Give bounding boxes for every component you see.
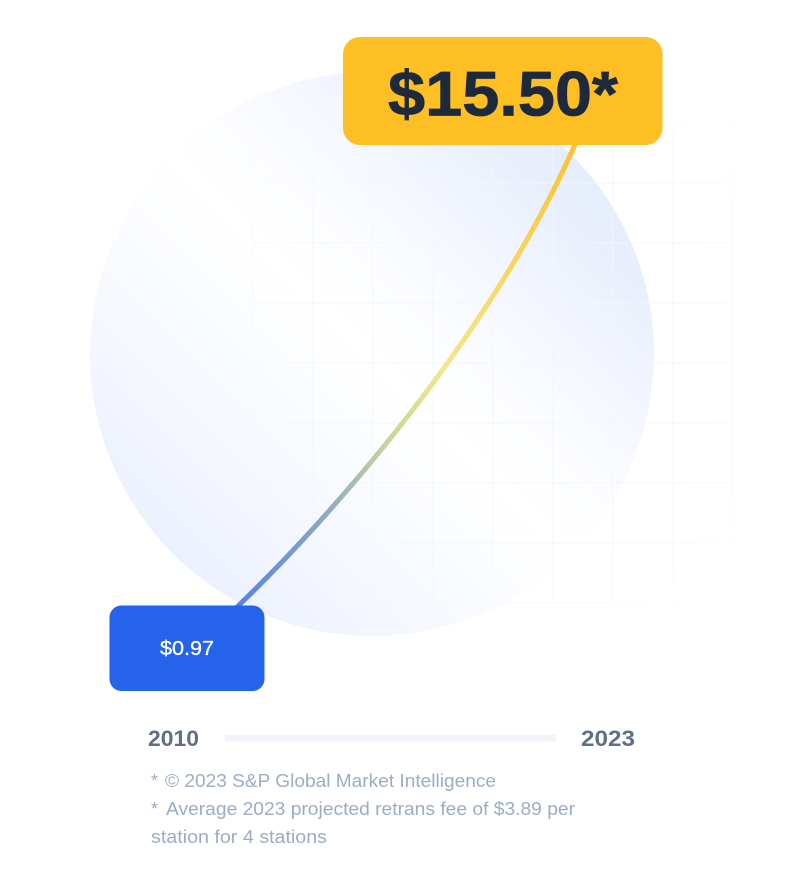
callout: 2023 value: $15.50* <box>388 60 619 130</box>
footnote: average fee continued: station for 4 stations <box>151 827 327 847</box>
callout: 2010 value: $0.97 <box>160 638 214 660</box>
footnote: source: * <box>151 771 158 791</box>
infographic <box>90 37 734 843</box>
footnotes <box>151 771 575 847</box>
growth curve <box>236 140 577 608</box>
callout: 2023 value <box>343 37 662 145</box>
footnote: average fee: * <box>151 799 158 819</box>
callout: 2010 value <box>110 606 264 691</box>
footnote: average fee: Average 2023 projected retrans fee of $3.89 per <box>166 799 575 819</box>
chart grid <box>286 145 734 577</box>
timeline bar <box>225 735 556 742</box>
background circle <box>90 72 654 636</box>
footnote: source: © 2023 S&P Global Market Intelligence <box>165 771 496 791</box>
start year label: 2010 <box>148 726 199 751</box>
timeline axis <box>148 726 635 751</box>
end year label: 2023 <box>581 726 635 751</box>
